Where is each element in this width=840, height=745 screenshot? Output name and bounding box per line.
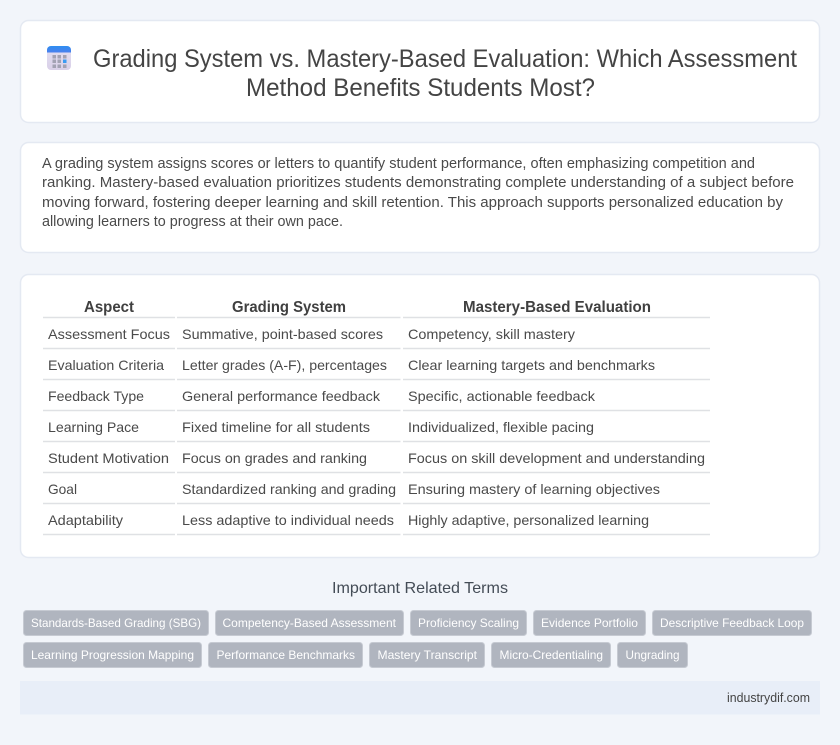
- footer source: industrydif.com: [727, 690, 810, 705]
- table header: Mastery-Based Evaluation: [463, 299, 651, 316]
- table row: adaptability: Highly adaptive, personalized learning: [408, 512, 649, 528]
- table row: adaptability: Adaptability: [48, 512, 123, 528]
- tag: descriptive feedback loop: [652, 610, 812, 636]
- table row: assessment focus: [48, 326, 575, 342]
- table header: Grading System: [232, 299, 346, 316]
- table row: learning pace: Individualized, flexible pacing: [408, 419, 594, 435]
- table row: learning pace: Fixed timeline for all students: [182, 419, 370, 435]
- tag: ungrading: [618, 642, 688, 668]
- table row: student motivation: [48, 450, 705, 466]
- title: [93, 45, 797, 102]
- table row: feedback type: Specific, actionable feedback: [408, 388, 596, 404]
- related term tags: [24, 610, 812, 668]
- panel: comparison table: [20, 274, 820, 558]
- table row: learning pace: [48, 419, 594, 435]
- table row: student motivation: Student Motivation: [48, 450, 169, 466]
- tag: standards-based grading: Standards-Based Grading (SBG): [31, 616, 201, 630]
- table row: assessment focus: Summative, point-based scores: [182, 326, 383, 342]
- heading: important related terms: Important Related Terms: [332, 580, 508, 597]
- table row: student motivation: Focus on grades and ranking: [182, 450, 367, 466]
- footer: [20, 681, 820, 714]
- table row: evaluation criteria: Letter grades (A-F), percentages: [182, 357, 387, 373]
- tag: mastery transcript: Mastery Transcript: [378, 648, 478, 662]
- panel: introduction: [20, 142, 820, 252]
- tag: learning progression mapping: Learning Progression Mapping: [31, 648, 194, 662]
- tag: micro-credentialing: Micro-Credentialing: [500, 648, 603, 662]
- tag: proficiency scaling: Proficiency Scaling: [418, 616, 519, 630]
- table row: goal: Ensuring mastery of learning objectives: [408, 481, 660, 497]
- tag: performance benchmarks: Performance Benchmarks: [216, 648, 355, 662]
- tag: evidence portfolio: Evidence Portfolio: [541, 616, 638, 630]
- title: Grading System vs. Mastery-Based Evaluation: Which Assessment: [93, 45, 797, 73]
- table row: feedback type: Feedback Type: [48, 388, 144, 404]
- table row: feedback type: [48, 388, 596, 404]
- table row: evaluation criteria: Evaluation Criteria: [48, 357, 164, 373]
- tag: mastery transcript: [370, 642, 484, 668]
- tag: proficiency scaling: [410, 610, 526, 636]
- table row: learning pace: Learning Pace: [48, 419, 139, 435]
- tag: competency-based assessment: Competency-Based Assessment: [222, 616, 397, 630]
- panel: header: [20, 20, 820, 122]
- table row: assessment focus: Assessment Focus: [48, 326, 170, 342]
- text block: introduction: [42, 156, 794, 230]
- tag: standards-based grading: [24, 610, 208, 636]
- text block: introduction: ranking. Mastery-based evaluation prioritizes students demonstrating complete understanding of a subject before: [42, 175, 794, 191]
- text block: introduction: moving forward, fostering deeper learning and skill retention. This approach supports personalized education by: [42, 195, 784, 211]
- table row: evaluation criteria: Clear learning targets and benchmarks: [408, 357, 655, 373]
- table header: Aspect: [84, 299, 135, 316]
- table header: [84, 299, 651, 316]
- tag: evidence portfolio: [534, 610, 646, 636]
- tag: descriptive feedback loop: Descriptive Feedback Loop: [660, 616, 804, 630]
- tag: learning progression mapping: [24, 642, 202, 668]
- table row: assessment focus: Competency, skill mastery: [408, 326, 575, 342]
- table row: goal: Standardized ranking and grading: [182, 481, 396, 497]
- tag: micro-credentialing: [492, 642, 610, 668]
- table row: student motivation: Focus on skill development and understanding: [408, 450, 705, 466]
- table row: evaluation criteria: [48, 357, 655, 373]
- text block: introduction: allowing learners to progress at their own pace.: [42, 214, 343, 230]
- text block: introduction: A grading system assigns scores or letters to quantify student performance, often emphasizing competition and: [42, 156, 755, 172]
- table row: goal: [48, 481, 660, 497]
- table row: goal: Goal: [48, 481, 77, 497]
- table row: feedback type: General performance feedback: [182, 388, 381, 404]
- tag: performance benchmarks: [208, 642, 362, 668]
- tag: ungrading: Ungrading: [626, 648, 680, 662]
- table row: adaptability: [48, 512, 649, 528]
- tag: competency-based assessment: [216, 610, 404, 636]
- title: Method Benefits Students Most?: [246, 74, 595, 102]
- table row: adaptability: Less adaptive to individual needs: [182, 512, 394, 528]
- icon: calendar: [47, 46, 71, 70]
